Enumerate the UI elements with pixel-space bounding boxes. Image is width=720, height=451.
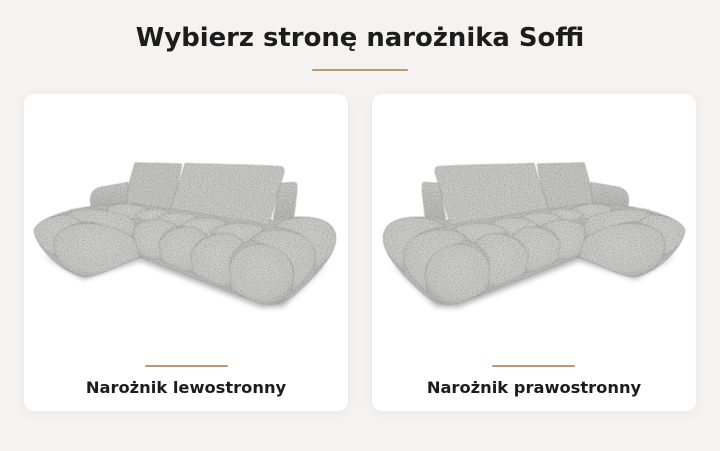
title: Wybierz stronę narożnika Soffi — [136, 23, 584, 53]
right card divider — [492, 365, 575, 367]
left card label: Narożnik lewostronny — [86, 378, 286, 397]
title divider — [312, 69, 408, 71]
photo: right-hand sofa — [382, 162, 686, 310]
panel: left-hand corner sofa — [24, 94, 348, 411]
left card divider — [145, 365, 228, 367]
photo: left-hand sofa — [33, 162, 337, 310]
panel: right-hand corner sofa — [372, 94, 696, 411]
right card label: Narożnik prawostronny — [427, 378, 641, 397]
